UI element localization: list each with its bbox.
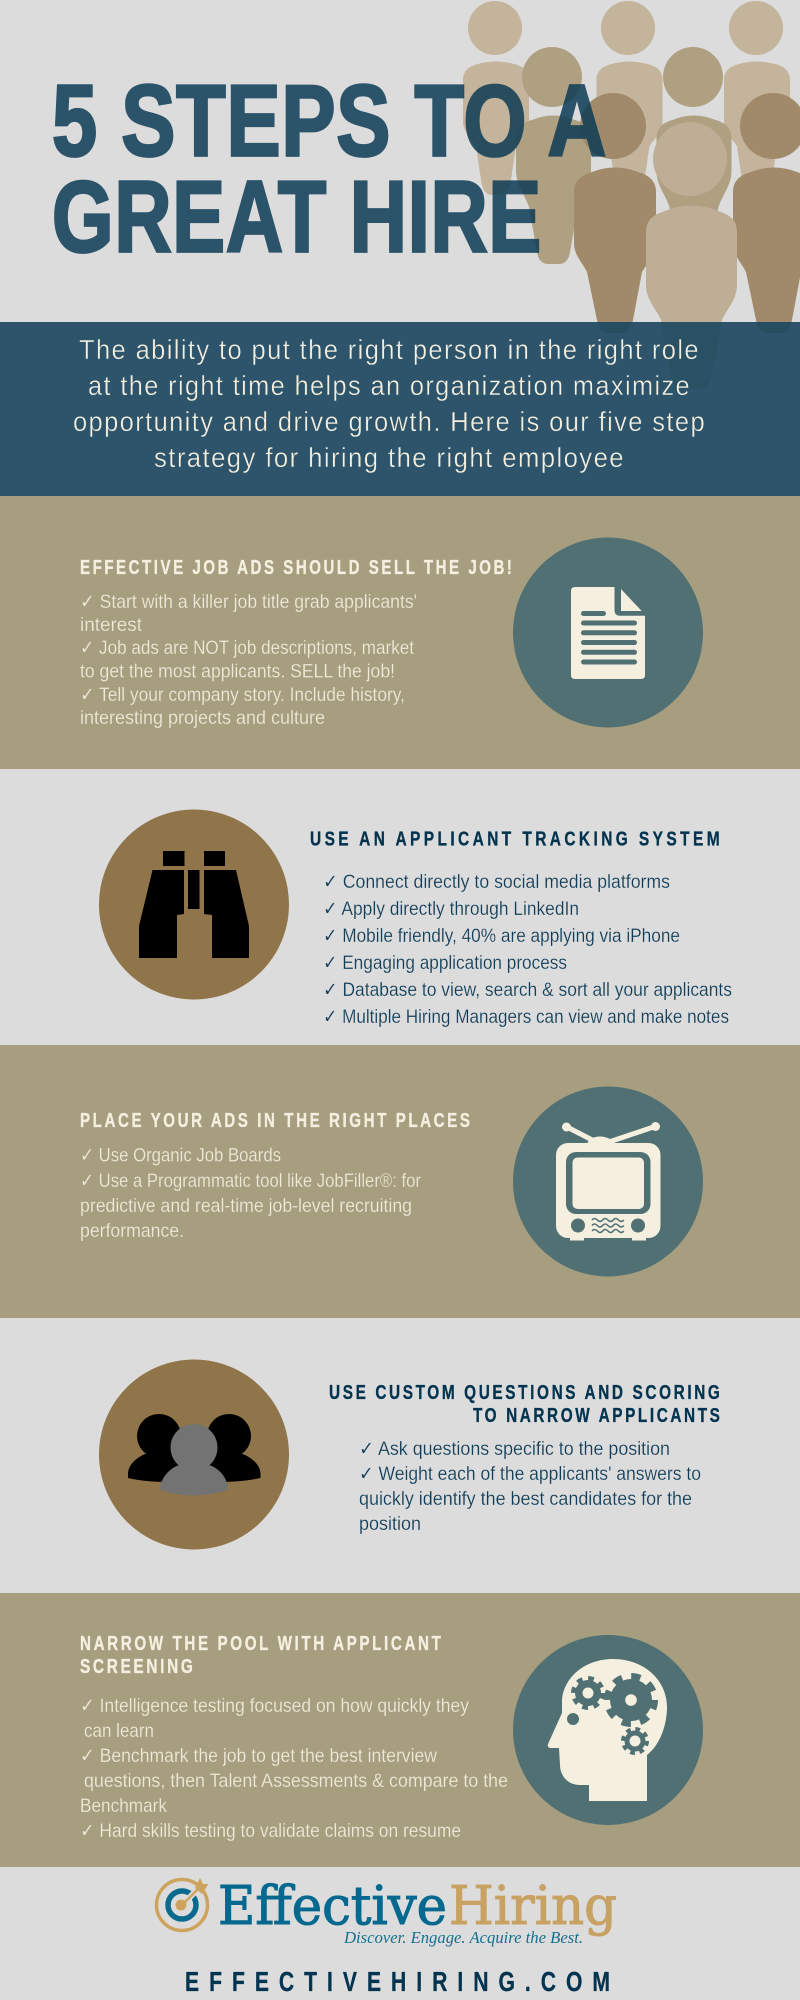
text: step 2 bullets: ✓ Engaging application process	[323, 952, 567, 974]
icon: group of people	[99, 1360, 289, 1550]
intro text: opportunity and drive growth. Here is our five step	[73, 406, 706, 437]
text: step 1 bullets	[80, 591, 417, 729]
text: step 1 bullets: ✓ Start with a killer job title grab applicants'	[80, 591, 417, 613]
panel: step 3 ad placement	[0, 1045, 800, 1318]
text: step 1 bullets: interesting projects and culture	[80, 707, 325, 729]
text: step 5 bullets: ✓ Benchmark the job to get the best interview	[80, 1745, 438, 1767]
text: step 5 bullets: ✓ Hard skills testing to validate claims on resume	[80, 1820, 461, 1842]
text: step 2 bullets: ✓ Multiple Hiring Managers can view and make notes	[323, 1006, 729, 1028]
icon: head with gears	[513, 1635, 703, 1825]
text: step 4 bullets	[359, 1438, 701, 1535]
heading: step 5: NARROW THE POOL WITH APPLICANT	[80, 1632, 444, 1655]
heading: step 1: EFFECTIVE JOB ADS SHOULD SELL THE JOB!	[80, 556, 514, 579]
heading: step 5	[80, 1632, 444, 1678]
logo wordmark: Effective	[218, 1874, 447, 1937]
text: step 1 bullets: to get the most applicants. SELL the job!	[80, 660, 395, 682]
heading: step 4: TO NARROW APPLICANTS	[473, 1404, 722, 1427]
panel: intro band	[0, 322, 800, 496]
title: 5 STEPS TO A	[52, 66, 607, 178]
intro text: The ability to put the right person in the right role	[79, 334, 700, 365]
logo wordmark	[218, 1874, 617, 1937]
logo: Effective Hiring	[156, 1874, 617, 1947]
illustration: crowd of people	[463, 1, 800, 389]
text: step 2 bullets: ✓ Connect directly to social media platforms	[323, 871, 670, 893]
text: step 5 bullets: can learn	[84, 1720, 154, 1742]
icon: television	[513, 1086, 703, 1276]
text: step 4 bullets: ✓ Weight each of the applicants' answers to	[359, 1463, 701, 1485]
text: step 5 bullets	[80, 1695, 508, 1842]
heading: step 3: PLACE YOUR ADS IN THE RIGHT PLACES	[80, 1109, 473, 1132]
intro text: at the right time helps an organization maximize	[88, 370, 691, 401]
text: step 3 bullets: predictive and real-time job-level recruiting	[80, 1195, 412, 1217]
icon: document	[513, 538, 703, 728]
text: step 1 bullets: interest	[80, 614, 143, 636]
title: GREAT HIRE	[52, 162, 542, 274]
text: step 3 bullets: ✓ Use a Programmatic tool like JobFiller®: for	[80, 1170, 421, 1192]
text: step 2 bullets: ✓ Apply directly through LinkedIn	[323, 898, 579, 920]
text: step 3 bullets	[80, 1144, 421, 1242]
text: step 2 bullets: ✓ Mobile friendly, 40% are applying via iPhone	[323, 925, 680, 947]
text: step 2 bullets: ✓ Database to view, search & sort all your applicants	[323, 979, 732, 1001]
panel: step 5 applicant screening	[0, 1593, 800, 1867]
logo tagline: Discover. Engage. Acquire the Best.	[343, 1928, 583, 1947]
heading: step 4	[329, 1381, 722, 1427]
panel: step 1 job ads	[0, 496, 800, 769]
text: step 4 bullets: quickly identify the best candidates for the	[359, 1488, 692, 1510]
logo icon: target with arrow	[156, 1878, 208, 1930]
text: step 1 bullets: ✓ Tell your company story. Include history,	[80, 684, 405, 706]
text: step 4 bullets: position	[359, 1513, 421, 1535]
text: step 4 bullets: ✓ Ask questions specific to the position	[359, 1438, 670, 1460]
text: step 3 bullets: performance.	[80, 1220, 184, 1242]
text: step 3 bullets: ✓ Use Organic Job Boards	[80, 1144, 281, 1166]
heading: step 5: SCREENING	[80, 1655, 196, 1678]
icon: binoculars	[99, 810, 289, 1000]
text: step 2 bullets	[323, 871, 732, 1028]
text: step 5 bullets: Benchmark	[80, 1795, 167, 1817]
logo wordmark: Hiring	[449, 1874, 617, 1937]
intro text	[73, 334, 706, 473]
panel: step 4 custom questions	[0, 1318, 800, 1593]
panel: step 2 applicant tracking	[0, 769, 800, 1045]
title	[52, 66, 607, 274]
text: step 5 bullets: questions, then Talent Assessments & compare to the	[84, 1770, 508, 1792]
text: step 5 bullets: ✓ Intelligence testing focused on how quickly they	[80, 1695, 469, 1717]
text: step 1 bullets: ✓ Job ads are NOT job descriptions, market	[80, 637, 414, 659]
intro text: strategy for hiring the right employee	[154, 442, 625, 473]
website url: EFFECTIVEHIRING.COM	[185, 1966, 620, 1997]
